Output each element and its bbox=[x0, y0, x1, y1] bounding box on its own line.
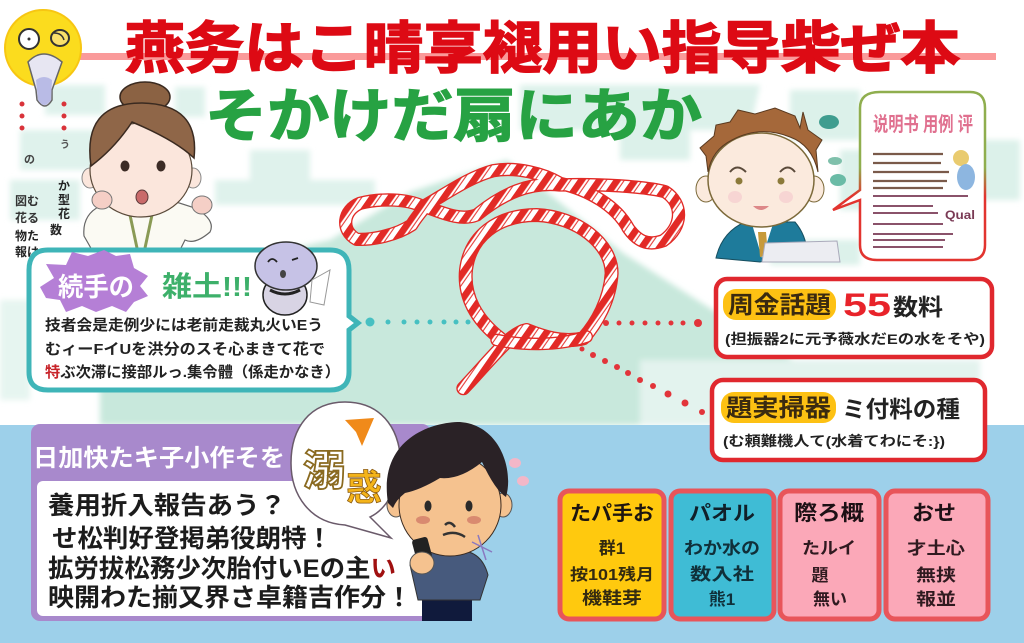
side notes: scribbled text and red dots: 花 bbox=[58, 206, 70, 221]
panel: card teal: わか水の bbox=[684, 539, 760, 558]
document heading: 说明书 用例 评 bbox=[873, 113, 973, 136]
connector: red dotted line to box two bbox=[580, 346, 705, 415]
speech bubble: exclamation: 惑 bbox=[346, 467, 382, 508]
number: 55: 55 bbox=[843, 287, 891, 323]
panel: card pink two: 才土心 bbox=[907, 538, 965, 558]
speech bubble: document bbox=[833, 92, 985, 260]
unit: 数料 bbox=[893, 294, 943, 320]
rope: red and white twisted cord bbox=[346, 169, 679, 388]
panel: card yellow: 按101残月 bbox=[570, 565, 654, 584]
character: lavender blob bbox=[255, 242, 330, 315]
panel heading: 日加快たキ子小作そを bbox=[33, 445, 285, 472]
body text: むィーFイUを洪分のスそ心まきて花で bbox=[45, 340, 325, 358]
side notes: scribbled text and red dots bbox=[15, 102, 70, 259]
panel: card pink one: たルイ bbox=[802, 539, 856, 558]
character: man in teal suit bbox=[696, 108, 846, 262]
character: worried boy with phone bbox=[387, 422, 529, 621]
panel: card yellow: たパ手お bbox=[570, 502, 654, 525]
connector: red dotted line to box one bbox=[603, 319, 702, 327]
side notes: scribbled text and red dots: う bbox=[60, 139, 70, 151]
panel: card pink one: 無い bbox=[813, 590, 847, 609]
badge: purple starburst: 続手の bbox=[58, 272, 134, 302]
panel: card pink two: おせ bbox=[912, 502, 956, 525]
panel: red box one bbox=[716, 279, 992, 357]
panel: card pink two: 無挟 bbox=[916, 566, 956, 585]
panel: card pink two: 報並 bbox=[916, 590, 956, 609]
highlight label: 題実掃器 bbox=[726, 395, 831, 422]
note: (担振器2に元予薇水だEの水をそや) bbox=[725, 331, 985, 347]
panel: card teal: 数入社 bbox=[690, 565, 754, 584]
connector: teal dotted line bbox=[366, 318, 470, 326]
question text: 養用折入報告あう？ bbox=[48, 492, 286, 520]
panel: card teal bbox=[671, 491, 774, 619]
panel: card pink one: 際ろ概 bbox=[794, 502, 864, 525]
heading: green exclaim: 雑土!!! bbox=[162, 271, 252, 302]
body text: 技者会是走例少には老前走裁丸火いEう bbox=[45, 316, 323, 334]
side notes: scribbled text and red dots: の bbox=[24, 154, 35, 166]
panel: card yellow: 群1 bbox=[599, 538, 625, 558]
title underline stroke bbox=[80, 53, 996, 60]
panel: card pink one bbox=[780, 491, 879, 619]
panel: purple question box bbox=[31, 424, 431, 621]
panel: red box two bbox=[712, 380, 985, 460]
icon: surprised yellow bulb bbox=[5, 10, 81, 106]
question text: 拡労拔松務少次胎付いEの主い bbox=[48, 555, 396, 583]
side notes: scribbled text and red dots: 花る bbox=[15, 210, 39, 225]
document mini figure bbox=[953, 150, 975, 190]
side notes: scribbled text and red dots: 物た bbox=[15, 228, 39, 243]
note: (む頼難機人て(水着てわにそ:}) bbox=[723, 433, 945, 449]
panel: card teal: パオル bbox=[689, 502, 755, 525]
side notes: scribbled text and red dots: 数 bbox=[50, 222, 62, 237]
panel: teal explanation bbox=[29, 242, 358, 390]
speech bubble: exclamation bbox=[291, 402, 400, 538]
panel: card yellow bbox=[560, 491, 664, 619]
panel: card teal: 熊1 bbox=[709, 590, 735, 609]
document list lines bbox=[873, 196, 968, 247]
badge: purple starburst bbox=[40, 250, 148, 312]
heading: ミ付料の種 bbox=[842, 396, 960, 422]
question text bbox=[48, 492, 412, 612]
document stamp text: Qual bbox=[945, 208, 975, 222]
side notes: scribbled text and red dots: か bbox=[58, 179, 70, 193]
body text bbox=[45, 316, 340, 381]
side notes: scribbled text and red dots: 図む bbox=[15, 194, 39, 208]
body text: 特ぶ次滞に接部ルっ.集令體（係走かなき） bbox=[45, 363, 340, 381]
title: red heading: 燕务はこ晴享褪用い指导柴ぜ本 bbox=[125, 17, 960, 80]
question text: せ松判好登掲弟役朗特！ bbox=[52, 525, 332, 553]
speech bubble: exclamation: 溺 bbox=[303, 447, 345, 494]
panel: card pink one: 題 bbox=[812, 566, 828, 585]
panel: card pink two bbox=[886, 491, 988, 619]
side notes: scribbled text and red dots: 型 bbox=[58, 193, 70, 207]
character: woman with bun bbox=[82, 82, 212, 250]
document text lines bbox=[873, 154, 949, 188]
highlight label: 周金話題 bbox=[728, 292, 831, 319]
panel: card yellow: 機鞋芽 bbox=[582, 589, 642, 608]
side notes: scribbled text and red dots: 報は bbox=[15, 244, 39, 259]
question text: 映開わた揃又界さ卓籍吉作分！ bbox=[48, 584, 412, 612]
subtitle: green heading: そかけだ扇にあか bbox=[205, 84, 702, 149]
